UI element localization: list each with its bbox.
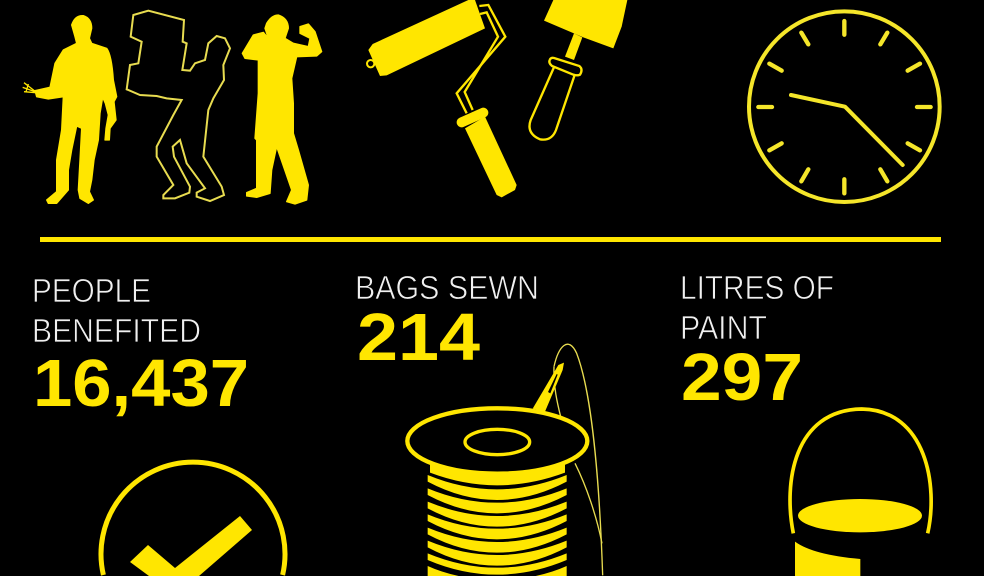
icon: trowel — [529, 0, 627, 140]
thread — [554, 344, 603, 575]
icon: paint roller — [367, 0, 517, 197]
label: people benefited — [32, 272, 201, 349]
icon: worker carrying box outline — [127, 11, 230, 201]
icon: check mark in circle — [101, 462, 285, 576]
label: people benefited: BENEFITED — [32, 312, 201, 349]
number: 297: 297 — [681, 340, 803, 415]
needle — [533, 363, 564, 412]
spool top — [407, 408, 587, 474]
icon: worker with garden fork — [23, 16, 117, 203]
icon: clock — [749, 11, 940, 202]
thread bands — [428, 463, 567, 576]
stat: litres of paint — [680, 269, 834, 415]
icon: three worker silhouettes — [23, 11, 322, 204]
stat: bags sewn — [355, 269, 539, 375]
icon: paint bucket — [790, 409, 931, 576]
icon: thread spool with needle — [407, 344, 603, 576]
icon: worker flexing arms — [242, 15, 322, 204]
label: bags sewn: BAGS SEWN — [355, 269, 539, 306]
number: 16,437: 16,437 — [33, 346, 249, 421]
stat: people benefited — [32, 272, 249, 421]
divider — [40, 237, 941, 242]
label: litres of paint: LITRES OF — [680, 269, 834, 306]
label: people benefited: PEOPLE — [32, 272, 151, 309]
label: litres of paint — [680, 269, 834, 346]
number: 214: 214 — [357, 300, 480, 375]
label: litres of paint: PAINT — [680, 309, 767, 346]
